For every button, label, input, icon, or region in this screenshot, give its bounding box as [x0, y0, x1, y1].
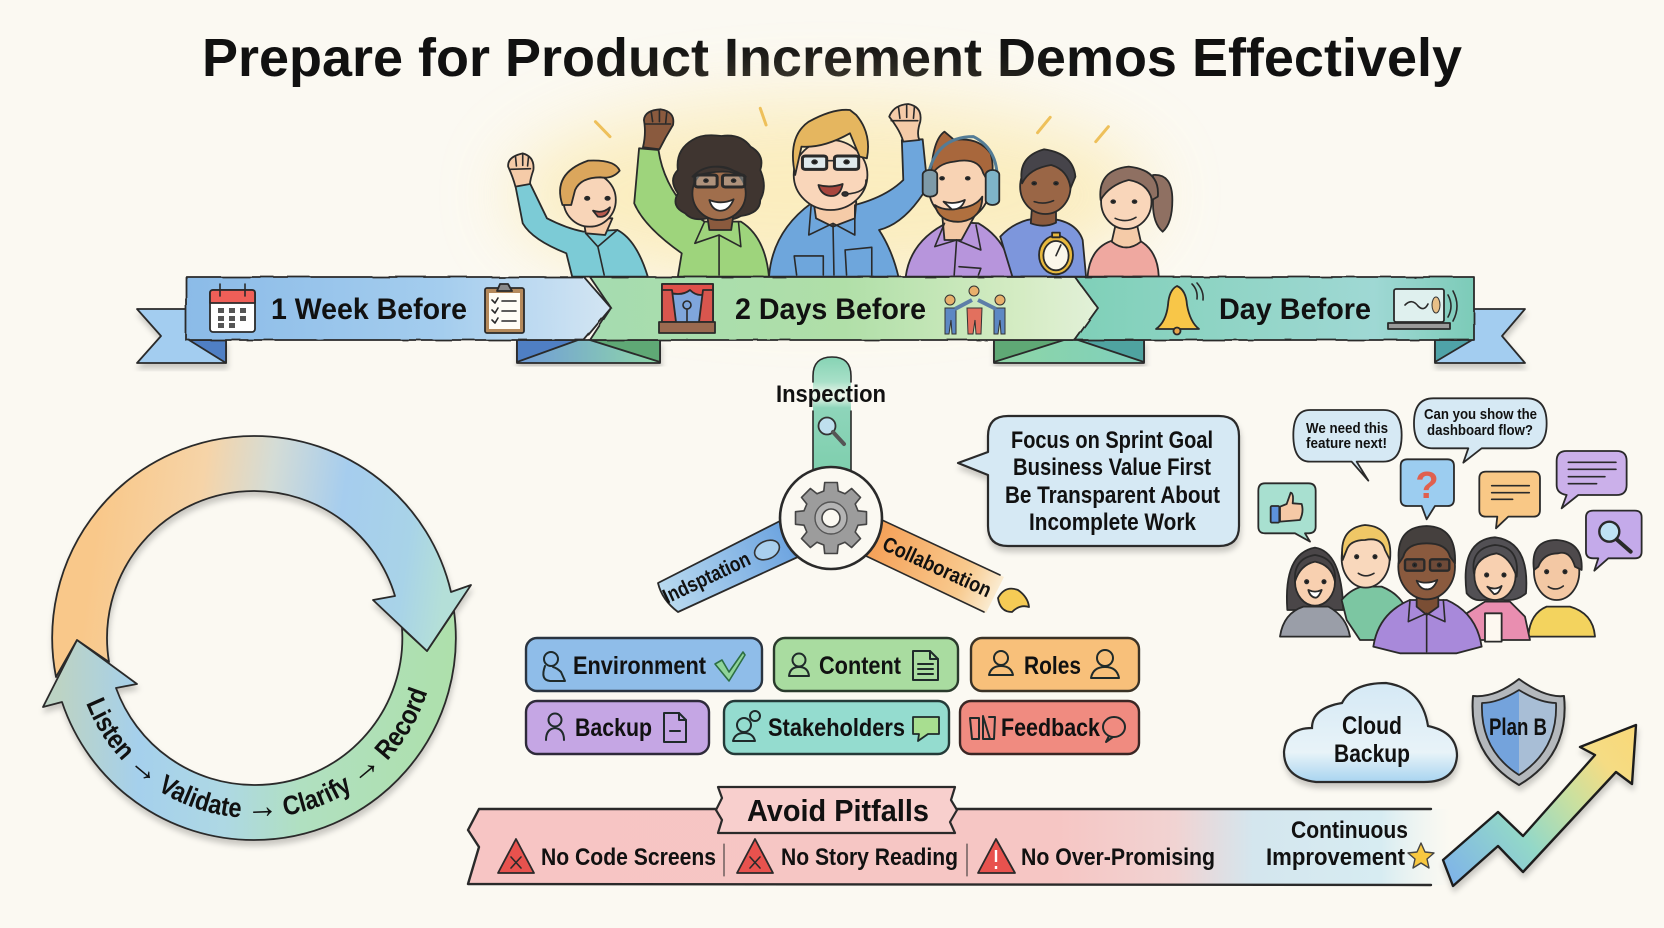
chip: roles	[971, 638, 1139, 691]
icon: group of people	[945, 286, 1005, 334]
chip: content: Content	[819, 652, 902, 680]
warning: no code screens: No Code Screens	[541, 844, 716, 871]
chip: backup	[526, 701, 709, 754]
warning: no code screens	[498, 839, 716, 873]
arrow arc: blue-green lower cycle	[43, 611, 456, 840]
rays	[595, 108, 1108, 142]
speech bubble: dashboard flow	[1414, 398, 1547, 463]
audience person 2	[1342, 525, 1405, 640]
growth arrow	[1443, 725, 1636, 886]
speech bubble: question	[1401, 459, 1454, 519]
shield: plan b: Plan B	[1489, 714, 1547, 741]
callout: focus reminders: Business Value First	[1013, 454, 1211, 481]
cloud backup: Cloud	[1342, 712, 1402, 740]
ribbon segment: 2 days before	[590, 277, 1098, 340]
band background	[468, 809, 1450, 885]
label: continuous improvement	[1266, 817, 1408, 871]
scrum pillars gear diagram	[658, 357, 1029, 613]
cloud backup: Backup	[1334, 740, 1410, 768]
audience person 4	[1466, 537, 1530, 642]
label: continuous improvement: Continuous	[1291, 817, 1408, 844]
checklist chips	[526, 638, 1139, 754]
banner: avoid pitfalls: Avoid Pitfalls	[747, 793, 929, 828]
icon: stage	[659, 284, 715, 333]
chip: stakeholders: Stakeholders	[768, 714, 905, 742]
icon: calendar	[210, 284, 255, 332]
speech bubble: orange note	[1479, 472, 1540, 528]
arrow arc: orange-blue upper cycle	[52, 436, 471, 677]
pillar: adaptation	[658, 520, 800, 612]
divider	[723, 844, 725, 876]
icon: bell	[1156, 283, 1203, 334]
person: girl with ponytail in pink top	[1088, 167, 1172, 277]
question mark glyph: ?	[1415, 465, 1439, 507]
icon: laptop with sound	[1388, 289, 1457, 329]
person: man in purple shirt with headphones	[906, 132, 1013, 277]
chip: feedback: Feedback	[1001, 714, 1100, 742]
title: Prepare for Product Increment Demos Effectively	[202, 28, 1462, 88]
bubble text: dashboard flow	[1424, 406, 1537, 439]
ribbon left tail	[137, 309, 226, 363]
ribbon fold under two days	[994, 340, 1144, 363]
icon: star	[1408, 843, 1434, 868]
chip: environment	[526, 638, 762, 691]
banner: avoid pitfalls	[716, 787, 957, 833]
speech bubble: purple text	[1557, 451, 1627, 508]
bubble text: we need this feature next: We need this	[1306, 420, 1388, 437]
ribbon segment: day before	[1075, 277, 1474, 340]
warning: no story reading: No Story Reading	[781, 844, 958, 871]
audience person 3	[1373, 526, 1482, 653]
person: boy in teal shirt	[508, 153, 648, 277]
ribbon fold under week one	[517, 340, 660, 363]
chip: content	[774, 638, 958, 691]
shield: plan b	[1473, 679, 1565, 785]
stakeholder audience group	[1258, 398, 1642, 653]
callout: focus reminders: Incomplete Work	[1029, 509, 1197, 536]
speech bubble: we need this feature next	[1293, 410, 1402, 481]
callout: focus reminders: Be Transparent About	[1005, 482, 1220, 509]
bubble text: dashboard flow: dashboard flow?	[1427, 422, 1533, 439]
cycle text: listen validate clarify record: Listen → Validate → Clarify → Record	[86, 686, 427, 818]
bubble text: dashboard flow: Can you show the	[1424, 406, 1537, 423]
audience person 1	[1280, 548, 1350, 637]
warning: no over-promising	[978, 839, 1215, 873]
person: lead presenter in blue shirt with headset	[769, 104, 928, 277]
callout: focus reminders: Focus on Sprint Goal	[1011, 427, 1213, 454]
callout: focus reminders	[958, 416, 1239, 546]
chip: feedback	[960, 701, 1139, 754]
ribbon segment: 1 week before	[186, 277, 611, 340]
icon: yellow badge	[998, 589, 1029, 612]
label: continuous improvement: Improvement	[1266, 844, 1405, 871]
ribbon timeline	[137, 277, 1525, 363]
label: day before: Day Before	[1219, 293, 1371, 326]
icon: magnifier	[818, 418, 844, 444]
ribbon right tail	[1435, 309, 1525, 363]
label: inspection: Inspection	[776, 381, 886, 408]
label: collaboration: Collaboration	[879, 533, 995, 602]
bubble text: we need this feature next	[1306, 420, 1388, 452]
warning: no story reading	[737, 839, 958, 873]
pillar: collaboration	[866, 520, 1004, 613]
label: 2 days before: 2 Days Before	[735, 293, 926, 326]
avoid pitfalls band	[468, 787, 1450, 885]
divider	[966, 844, 968, 876]
pillar: inspection	[813, 357, 851, 470]
cycle arrows ring	[43, 436, 471, 840]
icon: clipboard	[485, 284, 524, 333]
gear hub	[780, 467, 882, 569]
person: woman in green shirt	[634, 109, 769, 277]
icon: adaptation blob	[751, 536, 783, 564]
audience person 5	[1528, 540, 1595, 637]
cloud backup	[1284, 683, 1457, 782]
label: 1 week before: 1 Week Before	[271, 293, 467, 326]
chip: stakeholders	[724, 701, 949, 754]
bubble text: we need this feature next: feature next!	[1306, 435, 1387, 452]
person: man in blue sweater with stopwatch	[1000, 149, 1086, 277]
chip: environment: Environment	[573, 652, 707, 680]
speech bubble: magnifier	[1586, 511, 1642, 571]
warning: no over-promising: No Over-Promising	[1021, 844, 1215, 871]
speech bubble: thumbs up	[1258, 483, 1316, 542]
team illustration: celebrating team	[508, 100, 1172, 290]
chip: roles: Roles	[1024, 652, 1081, 680]
label: adaptation: Indsptation	[659, 548, 754, 609]
chip: backup: Backup	[575, 714, 652, 742]
